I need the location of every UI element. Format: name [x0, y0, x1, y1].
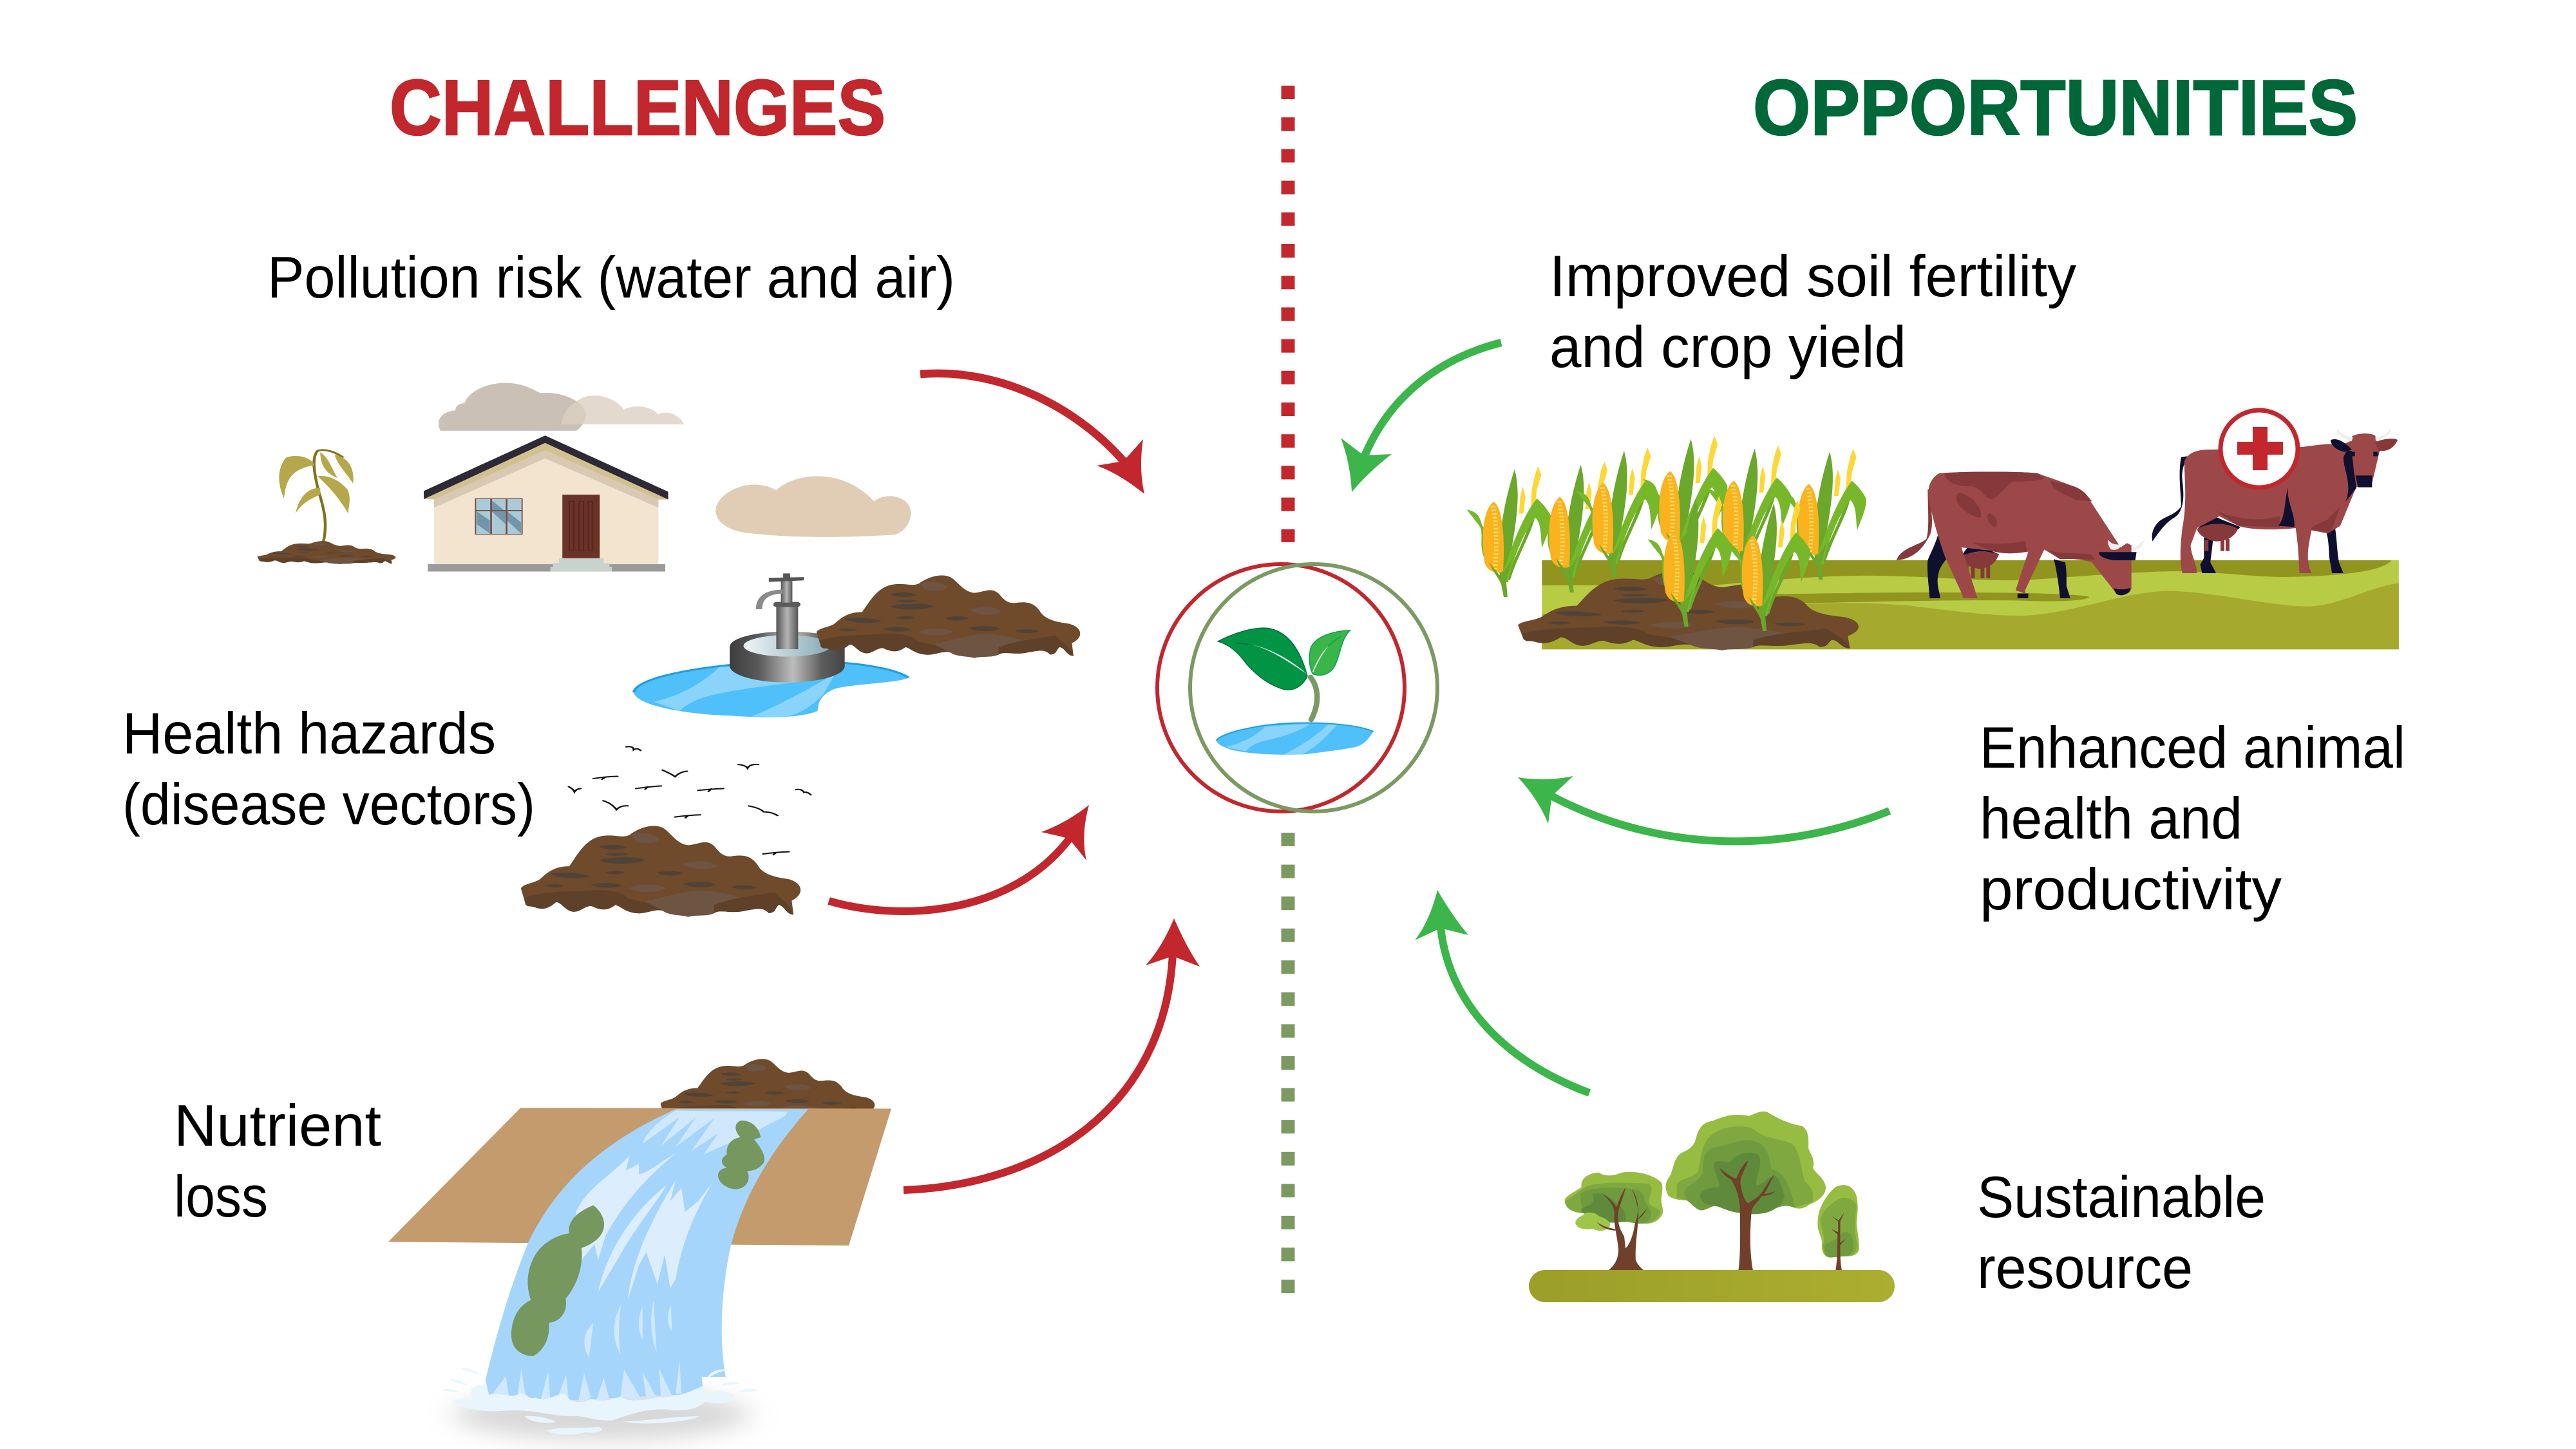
icon: left tree [1565, 1172, 1663, 1270]
title: CHALLENGES: CHALLENGES [390, 64, 886, 151]
text: sustainable resource: resource [1977, 1236, 2193, 1301]
text: health hazards: (disease vectors) [122, 772, 535, 837]
text: health hazards: Health hazards [122, 701, 496, 766]
nutrient blobs [511, 1206, 604, 1356]
arrow: animal health to centre [1518, 776, 1889, 841]
illustration: farmland with cows [1542, 428, 2399, 649]
water stream [486, 1109, 808, 1404]
icon: grazing cow [1897, 471, 2145, 598]
text: enhanced animal health: Enhanced animal [1980, 715, 2405, 781]
icon: soil pile in field [1518, 570, 1859, 650]
ground strip [1529, 1270, 1895, 1302]
ground [1542, 560, 2399, 649]
icon: soil pile near tap [817, 575, 1080, 658]
icon: seedling over water [1217, 628, 1374, 755]
icon: standing cow with health badge [2152, 428, 2398, 573]
text: enhanced animal health: productivity [1980, 857, 2282, 922]
icon: soil pile on land edge [661, 1059, 875, 1109]
foam [441, 1368, 759, 1435]
icon: water tap fountain in pond [634, 573, 909, 717]
icon: centre tree [1665, 1112, 1826, 1270]
text: pollution risk: Pollution risk (water and air) [267, 245, 955, 310]
text: sustainable resource [1977, 1165, 2266, 1301]
icon: right tree [1817, 1185, 1859, 1270]
icon: beige cloud [715, 476, 911, 537]
icon: health badge [2221, 410, 2298, 488]
text: enhanced animal health: health and [1980, 786, 2242, 851]
arrow: health hazards to centre [829, 805, 1089, 911]
land slab [388, 1108, 891, 1245]
icon: house [424, 435, 668, 572]
illustration: three trees on green strip [1529, 1112, 1895, 1302]
text: nutrient loss: loss [174, 1164, 268, 1229]
icon: flying insects [569, 746, 811, 855]
icon: pale cloud [562, 395, 685, 424]
icon: soil pile with insects [521, 826, 800, 917]
arrow: soil fertility to centre [1341, 343, 1501, 492]
text: enhanced animal health [1980, 715, 2405, 922]
icon: grey cloud [439, 383, 586, 431]
text: improved soil fertility [1549, 244, 2076, 380]
title: OPPORTUNITIES: OPPORTUNITIES [1753, 64, 2358, 151]
text: sustainable resource: Sustainable [1977, 1165, 2266, 1230]
illustration: front row of maize [1647, 496, 1810, 631]
arrow: pollution to centre [920, 374, 1144, 494]
arrow: sustainable resource to centre [1415, 890, 1589, 1093]
text: improved soil fertility: Improved soil fertility [1549, 244, 2076, 309]
illustration: runoff waterfall over land [388, 1059, 891, 1440]
illustration: pollution scene with plant, house and clouds [279, 383, 911, 855]
text: nutrient loss [174, 1094, 381, 1229]
water highlights [491, 1110, 787, 1404]
icon: soil under plant [257, 541, 395, 564]
text: nutrient loss: Nutrient [174, 1094, 381, 1159]
ground shadow [454, 1390, 750, 1440]
centre: overlapping circles with seedling [1157, 564, 1437, 811]
arrow: nutrient loss to centre [904, 918, 1200, 1190]
text: improved soil fertility: and crop yield [1549, 315, 1906, 380]
icon: wilted plant [279, 450, 354, 543]
illustration: back row of maize [1467, 436, 1866, 597]
text: health hazards [122, 701, 535, 837]
